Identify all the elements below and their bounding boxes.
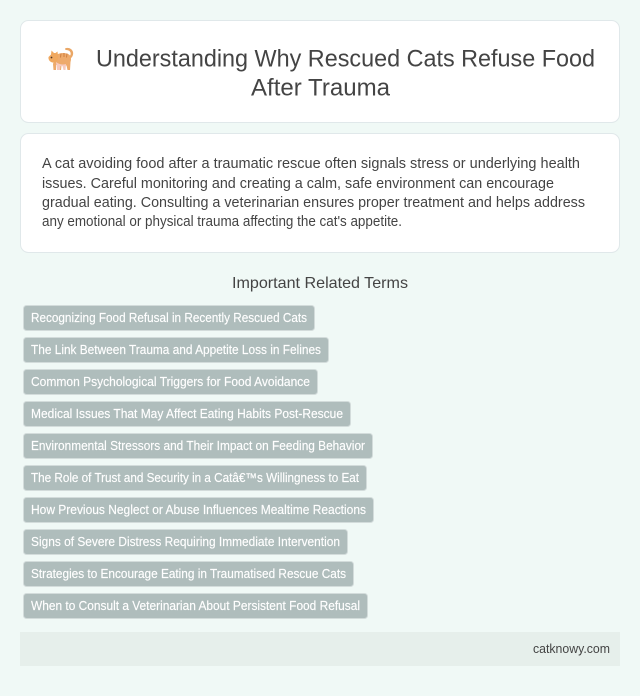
tag 9 <box>24 562 354 586</box>
text block: summary: any emotional or physical trauma affecting the cat's appetite. <box>42 213 402 230</box>
tag 10 <box>24 594 368 618</box>
tag 10: When to Consult a Veterinarian About Persistent Food Refusal <box>31 599 360 613</box>
tag 2 <box>24 338 328 362</box>
tag 7 <box>24 498 374 522</box>
title: Understanding Why Rescued Cats Refuse Food <box>96 46 595 72</box>
tag 4 <box>24 402 350 426</box>
tag 8: Signs of Severe Distress Requiring Immediate Intervention <box>31 535 340 549</box>
icon: cat <box>48 48 73 70</box>
tag 1 <box>24 306 314 330</box>
tag 7: How Previous Neglect or Abuse Influences Mealtime Reactions <box>31 503 366 517</box>
tag 4: Medical Issues That May Affect Eating Habits Post-Rescue <box>31 407 343 421</box>
tag 3 <box>24 370 318 394</box>
title: After Trauma <box>251 74 391 102</box>
list: related term tags <box>24 306 374 618</box>
title <box>96 46 595 102</box>
panel: summary paragraph <box>20 134 620 252</box>
text block: summary: A cat avoiding food after a traumatic rescue often signals stress or underlying health <box>42 155 580 172</box>
tag 8 <box>24 530 348 554</box>
footer source text: catknowy.com <box>533 642 610 656</box>
tag 5: Environmental Stressors and Their Impact on Feeding Behavior <box>31 439 365 453</box>
tag 1: Recognizing Food Refusal in Recently Rescued Cats <box>31 311 307 325</box>
tag 6 <box>24 466 366 490</box>
text block: summary: issues. Careful monitoring and creating a calm, safe environment can encourage <box>42 175 554 192</box>
heading: related terms: Important Related Terms <box>232 275 408 292</box>
text block: summary: gradual eating. Consulting a veterinarian ensures proper treatment and helps address <box>42 194 585 211</box>
tag 6: The Role of Trust and Security in a Catâ€™s Willingness to Eat <box>31 471 359 485</box>
tag 2: The Link Between Trauma and Appetite Loss in Felines <box>31 343 321 357</box>
footer <box>20 632 620 666</box>
tag 9: Strategies to Encourage Eating in Traumatised Rescue Cats <box>31 567 346 581</box>
tag 5 <box>24 434 372 458</box>
tag 3: Common Psychological Triggers for Food Avoidance <box>31 375 310 389</box>
panel: title card <box>20 20 620 122</box>
text block: summary <box>42 155 585 230</box>
